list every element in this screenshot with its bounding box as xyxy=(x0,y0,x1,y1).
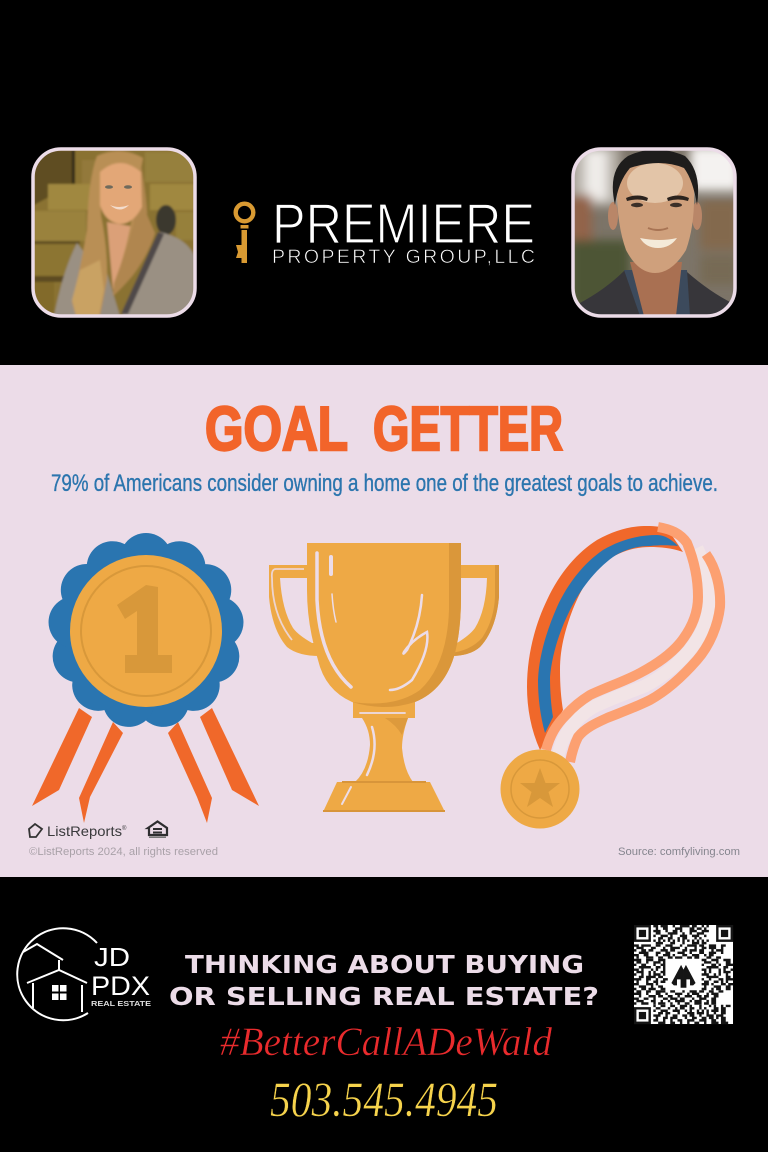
heading: GOAL GETTER: GETTER xyxy=(373,395,563,464)
call to action text: THINKING ABOUT BUYING xyxy=(185,950,584,979)
heading: GOAL GETTER xyxy=(205,395,563,464)
icon: star medal on ribbon xyxy=(500,526,720,828)
logo: Premiere Property Group: PROPERTY GROUP,LLC xyxy=(272,246,535,268)
logo: Premiere Property Group: PREMIERE xyxy=(272,192,535,256)
icon: trophy xyxy=(269,543,499,812)
logo: gold key xyxy=(236,204,253,263)
photo: woman agent xyxy=(30,146,200,321)
phone number: 503.545.4945 xyxy=(270,1071,498,1127)
icon: first place rosette xyxy=(32,532,259,823)
logo: JD PDX Real Estate: JD xyxy=(94,942,130,972)
call to action text: OR SELLING REAL ESTATE? xyxy=(169,982,599,1011)
heading: GOAL GETTER: GOAL xyxy=(205,395,348,464)
logo: JD PDX Real Estate xyxy=(17,928,151,1020)
logo: JD PDX Real Estate: PDX xyxy=(91,971,150,1001)
icon: equal housing xyxy=(148,822,167,838)
panel: goal getter xyxy=(0,365,768,877)
logo: ListReports: ® xyxy=(122,825,127,832)
call to action text xyxy=(169,950,599,1011)
QR code xyxy=(634,925,733,1024)
logo: ListReports: ListReports xyxy=(47,823,122,839)
source: Source: comfyliving.com xyxy=(618,846,740,858)
hashtag: #BetterCallADeWald xyxy=(220,1019,553,1064)
copyright: ©ListReports 2024, all rights reserved xyxy=(29,846,218,858)
photo: man agent xyxy=(570,146,740,321)
logo: JD PDX Real Estate: REAL ESTATE xyxy=(91,1001,151,1008)
